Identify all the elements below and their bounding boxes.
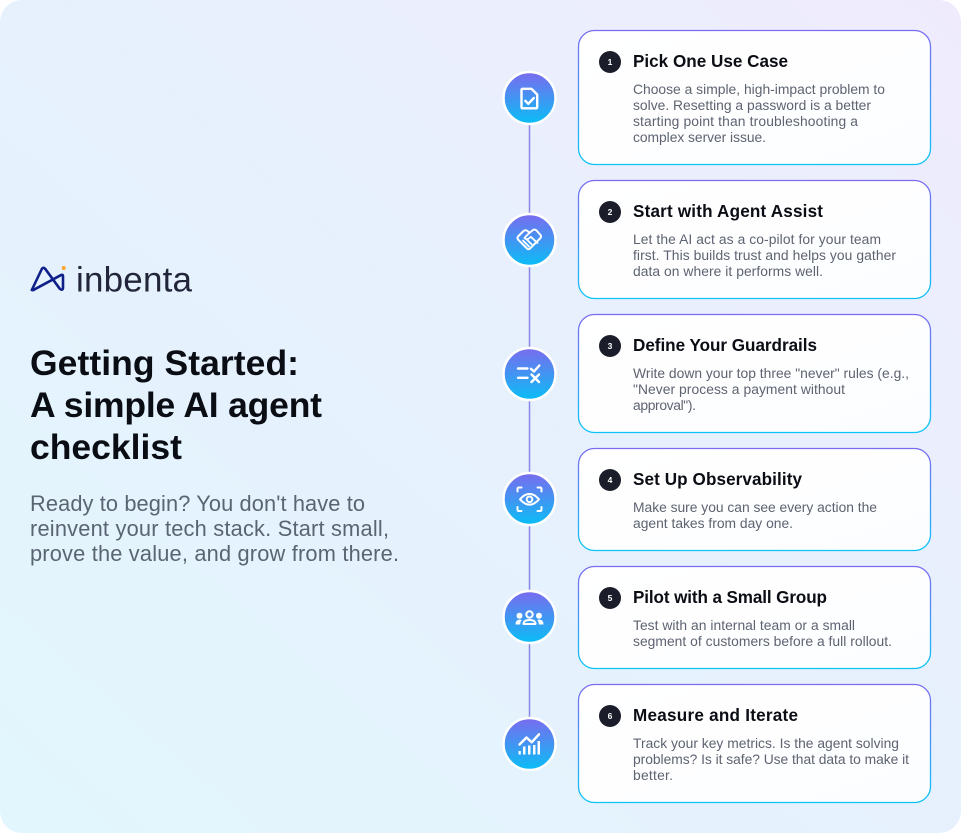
step 3 number [599, 335, 621, 357]
step 6 body: problems? Is it safe? Use that data to make it [633, 751, 909, 767]
heading: A simple AI agent [30, 385, 322, 425]
step 4 title: Set Up Observability [633, 470, 802, 489]
step 1 body: starting point than troubleshooting a [633, 113, 858, 129]
step 1 number: 1 [608, 57, 613, 67]
step 2 card [578, 180, 930, 298]
step 2 body: first. This builds trust and helps you gather [633, 247, 896, 263]
step 5 body [633, 617, 892, 649]
step 2 number [599, 201, 621, 223]
step 1 body: complex server issue. [633, 129, 766, 145]
step 1 title: Pick One Use Case [633, 52, 788, 71]
step 1 card [578, 30, 930, 164]
step 6 body: better. [633, 767, 673, 783]
step 4 icon: eye in frame [504, 473, 556, 525]
intro paragraph: Ready to begin? You don't have to [30, 491, 365, 516]
step 4 body: Make sure you can see every action the [633, 499, 877, 515]
step 2 body [633, 231, 896, 279]
step 6 body: Track your key metrics. Is the agent solving [633, 735, 899, 751]
step 2 body: data on where it performs well. [633, 263, 823, 279]
intro paragraph: prove the value, and grow from there. [30, 541, 399, 566]
step 5 card [578, 566, 930, 668]
step 6 icon: growth chart [504, 718, 556, 770]
step 2 body: Let the AI act as a co-pilot for your team [633, 231, 881, 247]
step 1 icon: document check [504, 72, 556, 124]
step 3 card [578, 314, 930, 432]
heading: Getting Started: [30, 343, 299, 383]
step 4 number: 4 [608, 475, 613, 485]
step 2 title: Start with Agent Assist [633, 202, 823, 221]
step 3 number: 3 [608, 341, 613, 351]
step 4 body: agent takes from day one. [633, 515, 793, 531]
step 6 card [578, 684, 930, 802]
step 5 icon: group of people [504, 591, 556, 643]
step 3 body: approval"). [633, 397, 696, 413]
step 2 number: 2 [608, 207, 613, 217]
heading: checklist [30, 427, 182, 467]
step 3 body: "Never process a payment without [633, 381, 845, 397]
step 3 title: Define Your Guardrails [633, 336, 817, 355]
step 4 body [633, 499, 877, 531]
intro paragraph [30, 491, 399, 566]
step 6 number: 6 [608, 711, 613, 721]
intro paragraph: reinvent your tech stack. Start small, [30, 516, 389, 541]
step 5 body: segment of customers before a full rollout. [633, 633, 892, 649]
step 6 title: Measure and Iterate [633, 706, 798, 725]
step 4 number [599, 469, 621, 491]
step 6 number [599, 705, 621, 727]
step 5 body: Test with an internal team or a small [633, 617, 855, 633]
step 1 body: solve. Resetting a password is a better [633, 97, 871, 113]
step 1 number [599, 51, 621, 73]
step 1 body [633, 81, 885, 145]
step 3 body: Write down your top three "never" rules (e.g., [633, 365, 909, 381]
step 5 number: 5 [608, 593, 613, 603]
heading [30, 343, 322, 467]
timeline connector [528, 120, 530, 725]
step 5 number [599, 587, 621, 609]
step 2 icon: handshake [504, 214, 556, 266]
logo: inbenta: inbenta [76, 260, 193, 300]
step 5 title: Pilot with a Small Group [633, 588, 827, 607]
step 4 card [578, 448, 930, 550]
step 3 icon: rules list [504, 348, 556, 400]
step 1 body: Choose a simple, high-impact problem to [633, 81, 885, 97]
step 3 body [633, 365, 909, 413]
step 6 body [633, 735, 909, 783]
